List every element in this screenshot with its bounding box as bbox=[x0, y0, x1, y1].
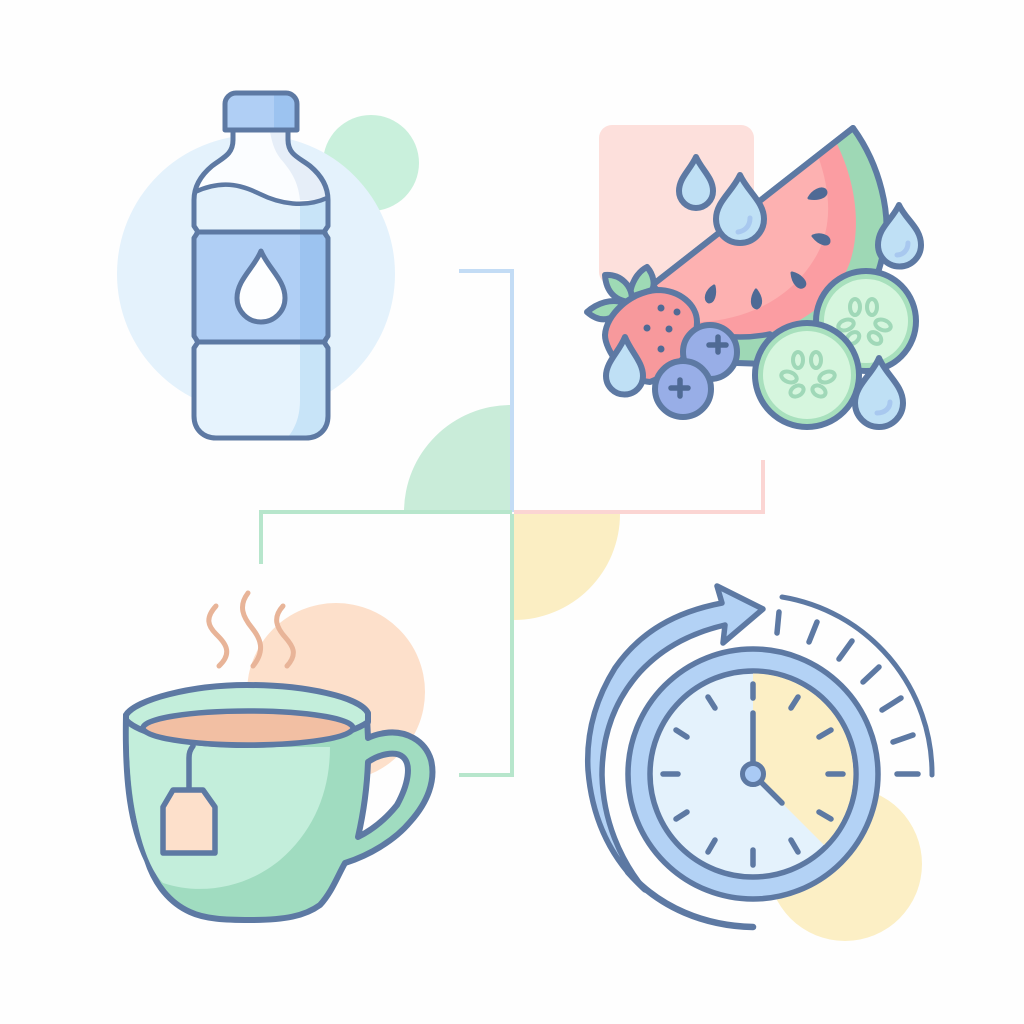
center connector diagram bbox=[261, 271, 763, 775]
blueberries bbox=[655, 325, 737, 417]
icon: cup of tea bbox=[126, 593, 432, 920]
icon: clock with arrow bbox=[588, 586, 932, 941]
strawberry bbox=[587, 267, 697, 382]
icon: water bottle bbox=[117, 93, 419, 438]
steam bbox=[209, 593, 293, 666]
icon: hydrating fruits bbox=[587, 125, 921, 427]
cucumber slices bbox=[755, 271, 916, 427]
